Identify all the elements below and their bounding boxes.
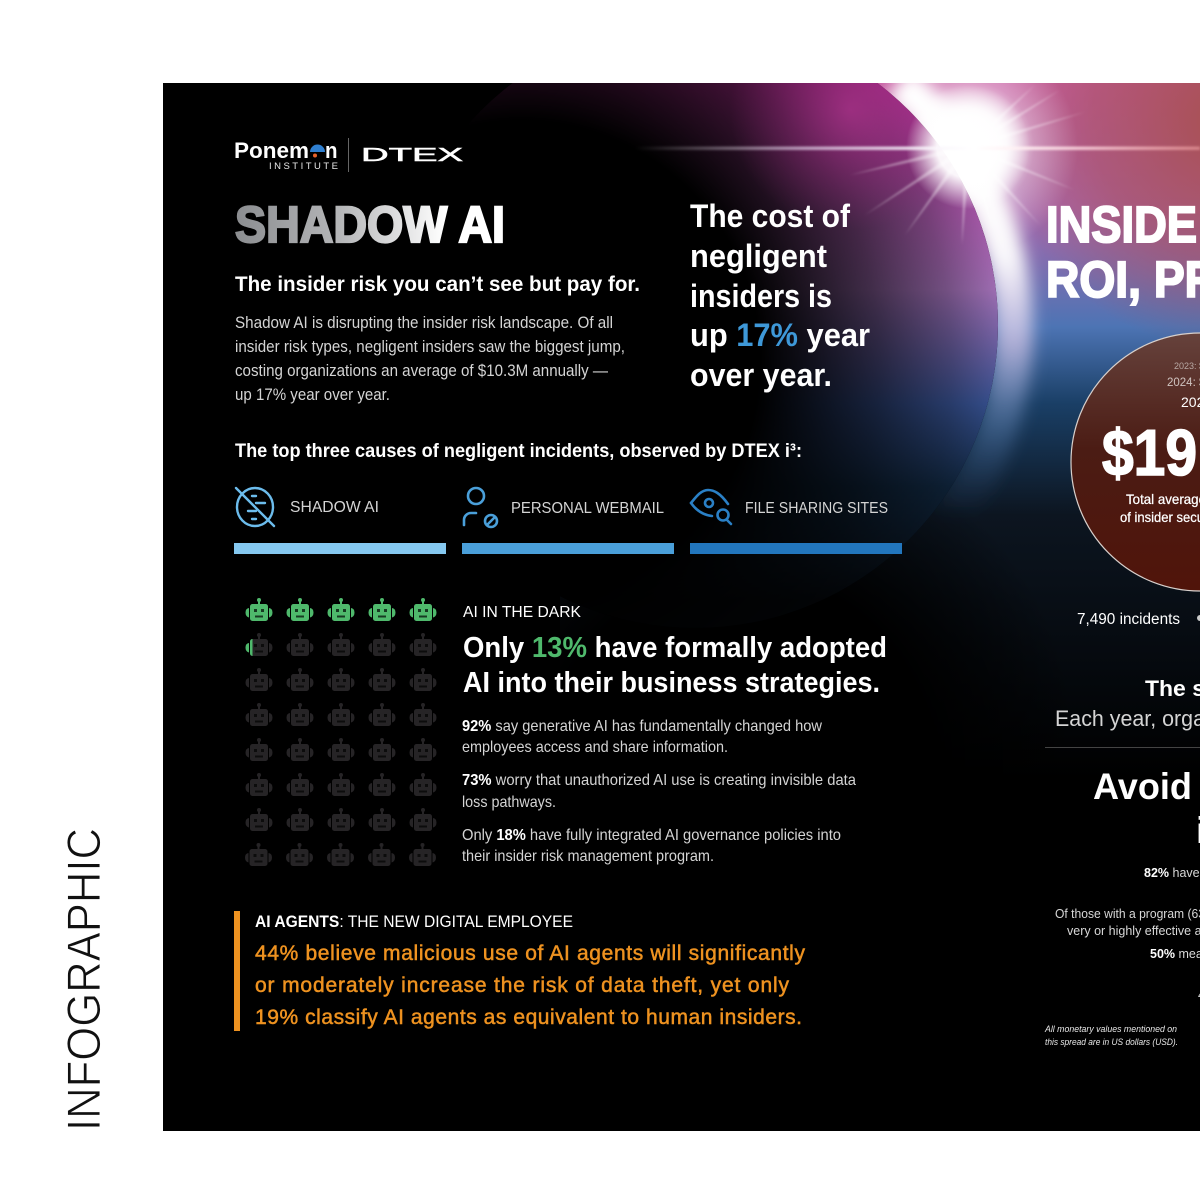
stat: 73%	[462, 772, 856, 811]
icon: eye with magnifier	[691, 490, 731, 524]
side label: infographic: INFOGRAPHIC	[57, 828, 110, 1131]
year values	[1167, 361, 1200, 410]
logo: Ponemon Institute: INSTITUTE	[269, 161, 338, 172]
incidents count: 7,490 incidents	[1077, 611, 1180, 628]
stat: 92%: employees access and share information.	[462, 739, 728, 756]
intro text block: Shadow AI is disrupting the insider risk landscape. Of all	[235, 314, 613, 332]
bar: shadow AI	[234, 543, 446, 554]
panel: cause file sharing sites	[690, 490, 902, 554]
callout heading: AI AGENTS: THE NEW DIGITAL EMPLOYEE	[255, 913, 573, 931]
stat: 92%	[462, 718, 822, 756]
right heading: insider ROI	[1046, 196, 1200, 308]
intro text block: up 17% year over year.	[235, 386, 390, 404]
title: SHADOW AI	[235, 196, 505, 253]
panel: cause personal webmail	[462, 488, 674, 554]
right stats	[1055, 866, 1200, 1002]
panel: cause shadow AI	[234, 488, 446, 554]
icon: crossed-out AI	[236, 488, 274, 526]
heading: top three causes: The top three causes of negligent incidents, observed by DTEX i³:	[235, 441, 802, 462]
heading: avoid	[1093, 766, 1200, 851]
heading: only 13% adopted AI: Only 13% have formally adopted	[463, 632, 887, 664]
stat: 18%: their insider risk management program.	[462, 848, 714, 865]
intro text block	[235, 314, 625, 404]
intro text block: costing organizations an average of $10.3M annually —	[235, 362, 608, 380]
subtitle: The insider risk you can’t see but pay for.	[235, 273, 640, 296]
text: the savings	[1055, 676, 1200, 731]
bar: personal webmail	[462, 543, 674, 554]
eyebrow: AI in the dark: AI IN THE DARK	[463, 604, 581, 621]
icon: blocked person	[464, 488, 497, 527]
callout text	[255, 942, 806, 1029]
stat: 18%	[462, 827, 841, 865]
stat circle: total average cost	[1071, 333, 1200, 591]
panel: AI in the dark	[462, 604, 887, 865]
callout: cost up 17%: over year.	[690, 357, 832, 393]
logo: Ponemon Institute: Ponem	[234, 138, 309, 163]
logo: DTEX: DTEX	[361, 145, 463, 165]
stat: 18%: Only 18% have fully integrated AI governance policies into	[462, 827, 841, 844]
pictogram chart: 13% of robots green	[245, 598, 436, 866]
stat: 92%: 92% say generative AI has fundamentally changed how	[462, 718, 822, 735]
callout text: 44% believe malicious use of AI agents will significantly	[255, 942, 806, 965]
callout text: 19% classify AI agents as equivalent to human insiders.	[255, 1006, 802, 1029]
label: file sharing sites: FILE SHARING SITES	[745, 500, 888, 517]
footnote	[1044, 1024, 1178, 1048]
heading: only 13% adopted AI: AI into their business strategies.	[463, 667, 880, 699]
footnote: this spread are in US dollars (USD).	[1045, 1037, 1178, 1048]
logo: Ponemon Institute: n	[325, 138, 338, 163]
footnote: All monetary values mentioned on	[1044, 1024, 1177, 1035]
callout: cost up 17%: insiders is	[690, 278, 832, 314]
callout: cost up 17%: up 17% year	[690, 317, 870, 353]
label: shadow AI: SHADOW AI	[290, 499, 379, 516]
stat: 73%: loss pathways.	[462, 794, 556, 811]
label: personal webmail: PERSONAL WEBMAIL	[511, 500, 664, 517]
callout: cost up 17%	[690, 198, 870, 393]
stat: 73%: 73% worry that unauthorized AI use is creating invisible data	[462, 772, 856, 789]
callout text: or moderately increase the risk of data theft, yet only	[255, 974, 790, 997]
callout: AI agents	[234, 911, 806, 1031]
logo: Ponemon Institute	[234, 138, 338, 172]
callout: cost up 17%: The cost of	[690, 198, 850, 234]
callout: cost up 17%: negligent	[690, 238, 827, 274]
heading: only 13% adopted AI	[463, 632, 887, 699]
circle caption	[1120, 491, 1200, 525]
heading: avoid: Avoid	[1093, 766, 1192, 807]
bar: file sharing sites	[690, 543, 902, 554]
background panel with eclipse	[163, 22, 1200, 1131]
logos	[234, 138, 463, 172]
intro text block: insider risk types, negligent insiders saw the biggest jump,	[235, 338, 625, 356]
right stats: 82% have	[1144, 866, 1200, 880]
